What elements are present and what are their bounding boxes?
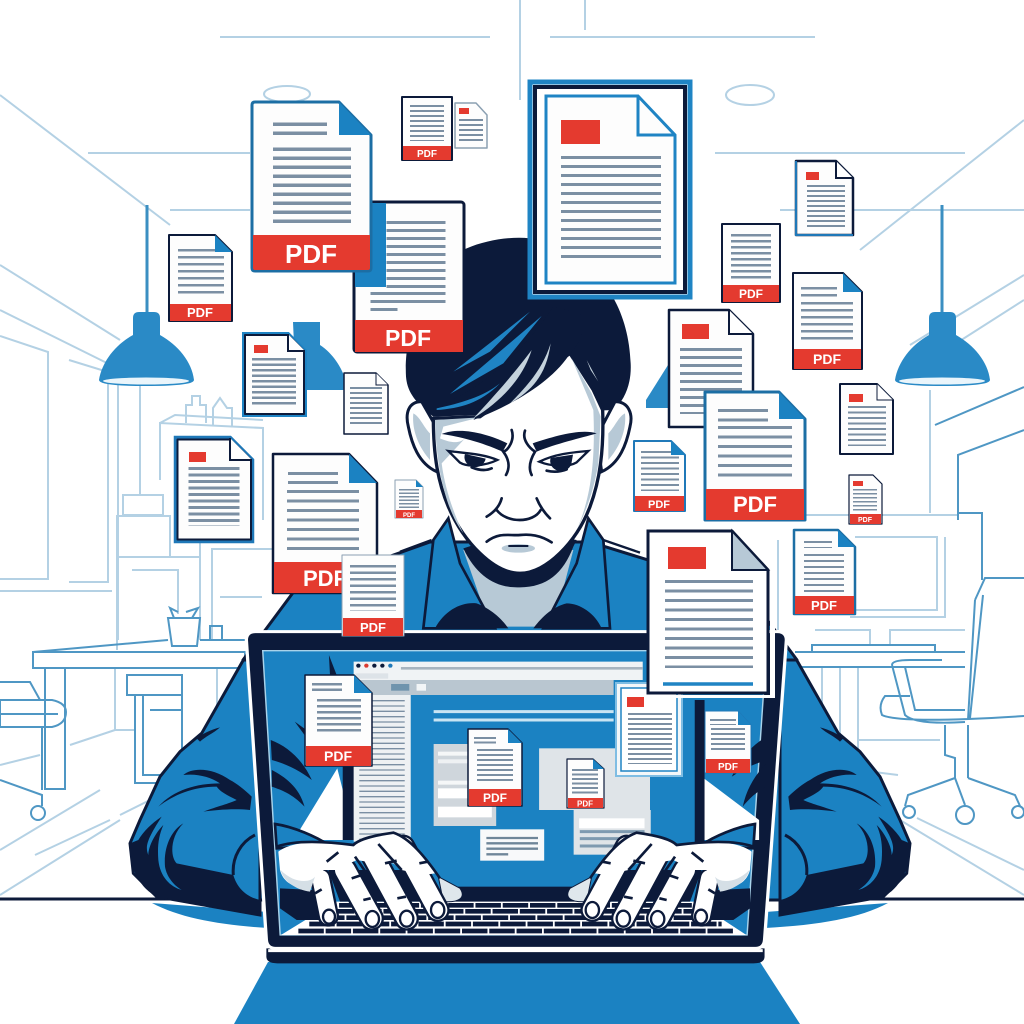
hair fringe (433, 307, 583, 420)
browser heading lines (434, 712, 614, 720)
pendant lamp left (99, 205, 194, 386)
floating PDF overlapping hair: PDF (385, 325, 431, 351)
tiny PDF by face: PDF (403, 513, 415, 519)
pendant lamp right of head (646, 365, 672, 408)
PDF on laptop top edge: PDF (360, 620, 386, 635)
PDF upper right: PDF (813, 351, 841, 367)
white shirt triangles (294, 768, 759, 840)
gaps between left fingers (328, 870, 430, 902)
right hand shading (715, 870, 749, 892)
face shading (435, 358, 601, 533)
back of left hand (278, 833, 435, 887)
PDF on screen far right: PDF (718, 762, 738, 773)
document far right (840, 384, 893, 454)
office desks and chairs darker line art (0, 387, 1024, 824)
pendant lamp behind documents (293, 322, 348, 390)
PDF on screen centre (468, 729, 522, 806)
PDF on screen small: PDF (577, 800, 593, 808)
hair blue streaks (437, 312, 542, 410)
PDF beside cheek (634, 441, 685, 511)
document top right (796, 161, 853, 235)
tiny PDF far right (849, 475, 882, 524)
left hand outline and knuckles (277, 833, 440, 900)
left fingers (321, 847, 438, 918)
floating PDF overlapping hair (354, 202, 464, 352)
left hand (275, 824, 462, 927)
hair gray streaks (473, 343, 598, 418)
PDF on screen small (567, 759, 604, 808)
left sleeve cuff (275, 824, 328, 848)
PDF upper right small: PDF (739, 287, 763, 301)
pupils (464, 454, 573, 471)
laptop base (266, 948, 765, 963)
desk edge line (0, 898, 1024, 900)
document red tab left (244, 334, 305, 415)
person torso (243, 542, 797, 900)
floating PDF large top left (252, 102, 371, 271)
neck and collar (400, 518, 640, 628)
ears (407, 402, 631, 472)
browser window (354, 662, 643, 695)
PDF left: PDF (187, 305, 213, 320)
large document over laptop corner (648, 531, 775, 698)
tiny PDF by face (395, 480, 423, 519)
PDF left (169, 235, 232, 321)
right hand (568, 824, 755, 927)
PDF on screen centre: PDF (483, 791, 507, 805)
tiny PDF far right: PDF (858, 517, 873, 524)
PDF on screen left (305, 675, 372, 766)
right fingernails (586, 902, 707, 927)
screen (263, 651, 766, 935)
laptop body (246, 632, 786, 963)
navy fold marks (271, 655, 766, 807)
left thumb (438, 877, 462, 902)
document right of head (669, 310, 753, 427)
large PDF right: PDF (733, 492, 777, 517)
right fingers (592, 847, 709, 918)
large PDF right (705, 392, 805, 520)
person head (406, 238, 631, 573)
left hand shading (281, 870, 315, 892)
browser panels (434, 744, 651, 861)
left arm (130, 660, 260, 915)
PDF on screen far right (705, 711, 751, 773)
lip shadow (502, 544, 535, 553)
desk shadows and blue base (152, 903, 888, 1024)
gaps between right fingers (600, 870, 702, 902)
navy shadow under left hand (280, 888, 335, 920)
large PDF lower left: PDF (303, 566, 347, 591)
navy shadow under right hand (695, 888, 750, 920)
keyboard (281, 887, 746, 935)
eyes (448, 451, 588, 466)
PDF beside cheek: PDF (648, 499, 670, 511)
right thumb (568, 877, 592, 902)
small PDF pair top (402, 97, 487, 160)
face (433, 353, 603, 573)
browser sidebar (354, 695, 411, 842)
frown wrinkles, nose and mouth (472, 430, 567, 542)
PDF lower right (794, 530, 855, 614)
pendant lamp right (895, 205, 990, 386)
small document centre left (344, 373, 388, 434)
right arm (780, 660, 910, 915)
document blue edge left (176, 438, 252, 541)
right hand outline and knuckles (590, 833, 753, 900)
framed document on screen right (616, 683, 682, 776)
laptop outer frame (246, 632, 786, 948)
PDF upper right (793, 273, 862, 369)
PDF on screen left: PDF (324, 748, 352, 764)
lower lip line (508, 543, 528, 549)
laptop white edge (268, 946, 763, 955)
hair back (406, 238, 631, 417)
large PDF lower left (273, 454, 377, 593)
PDF on laptop top edge (342, 555, 404, 636)
back of right hand (595, 833, 752, 887)
floating PDF large top left: PDF (285, 239, 337, 269)
PDF lower right: PDF (811, 598, 837, 613)
navy arm bands in screen (343, 700, 705, 847)
left fingernails (323, 902, 444, 927)
ear shading (413, 413, 625, 460)
small PDF pair top: PDF (417, 149, 437, 160)
eyebrows (442, 431, 597, 452)
right sleeve cuff (702, 824, 755, 848)
framed document top centre (530, 82, 690, 297)
PDF upper right small (722, 224, 780, 302)
